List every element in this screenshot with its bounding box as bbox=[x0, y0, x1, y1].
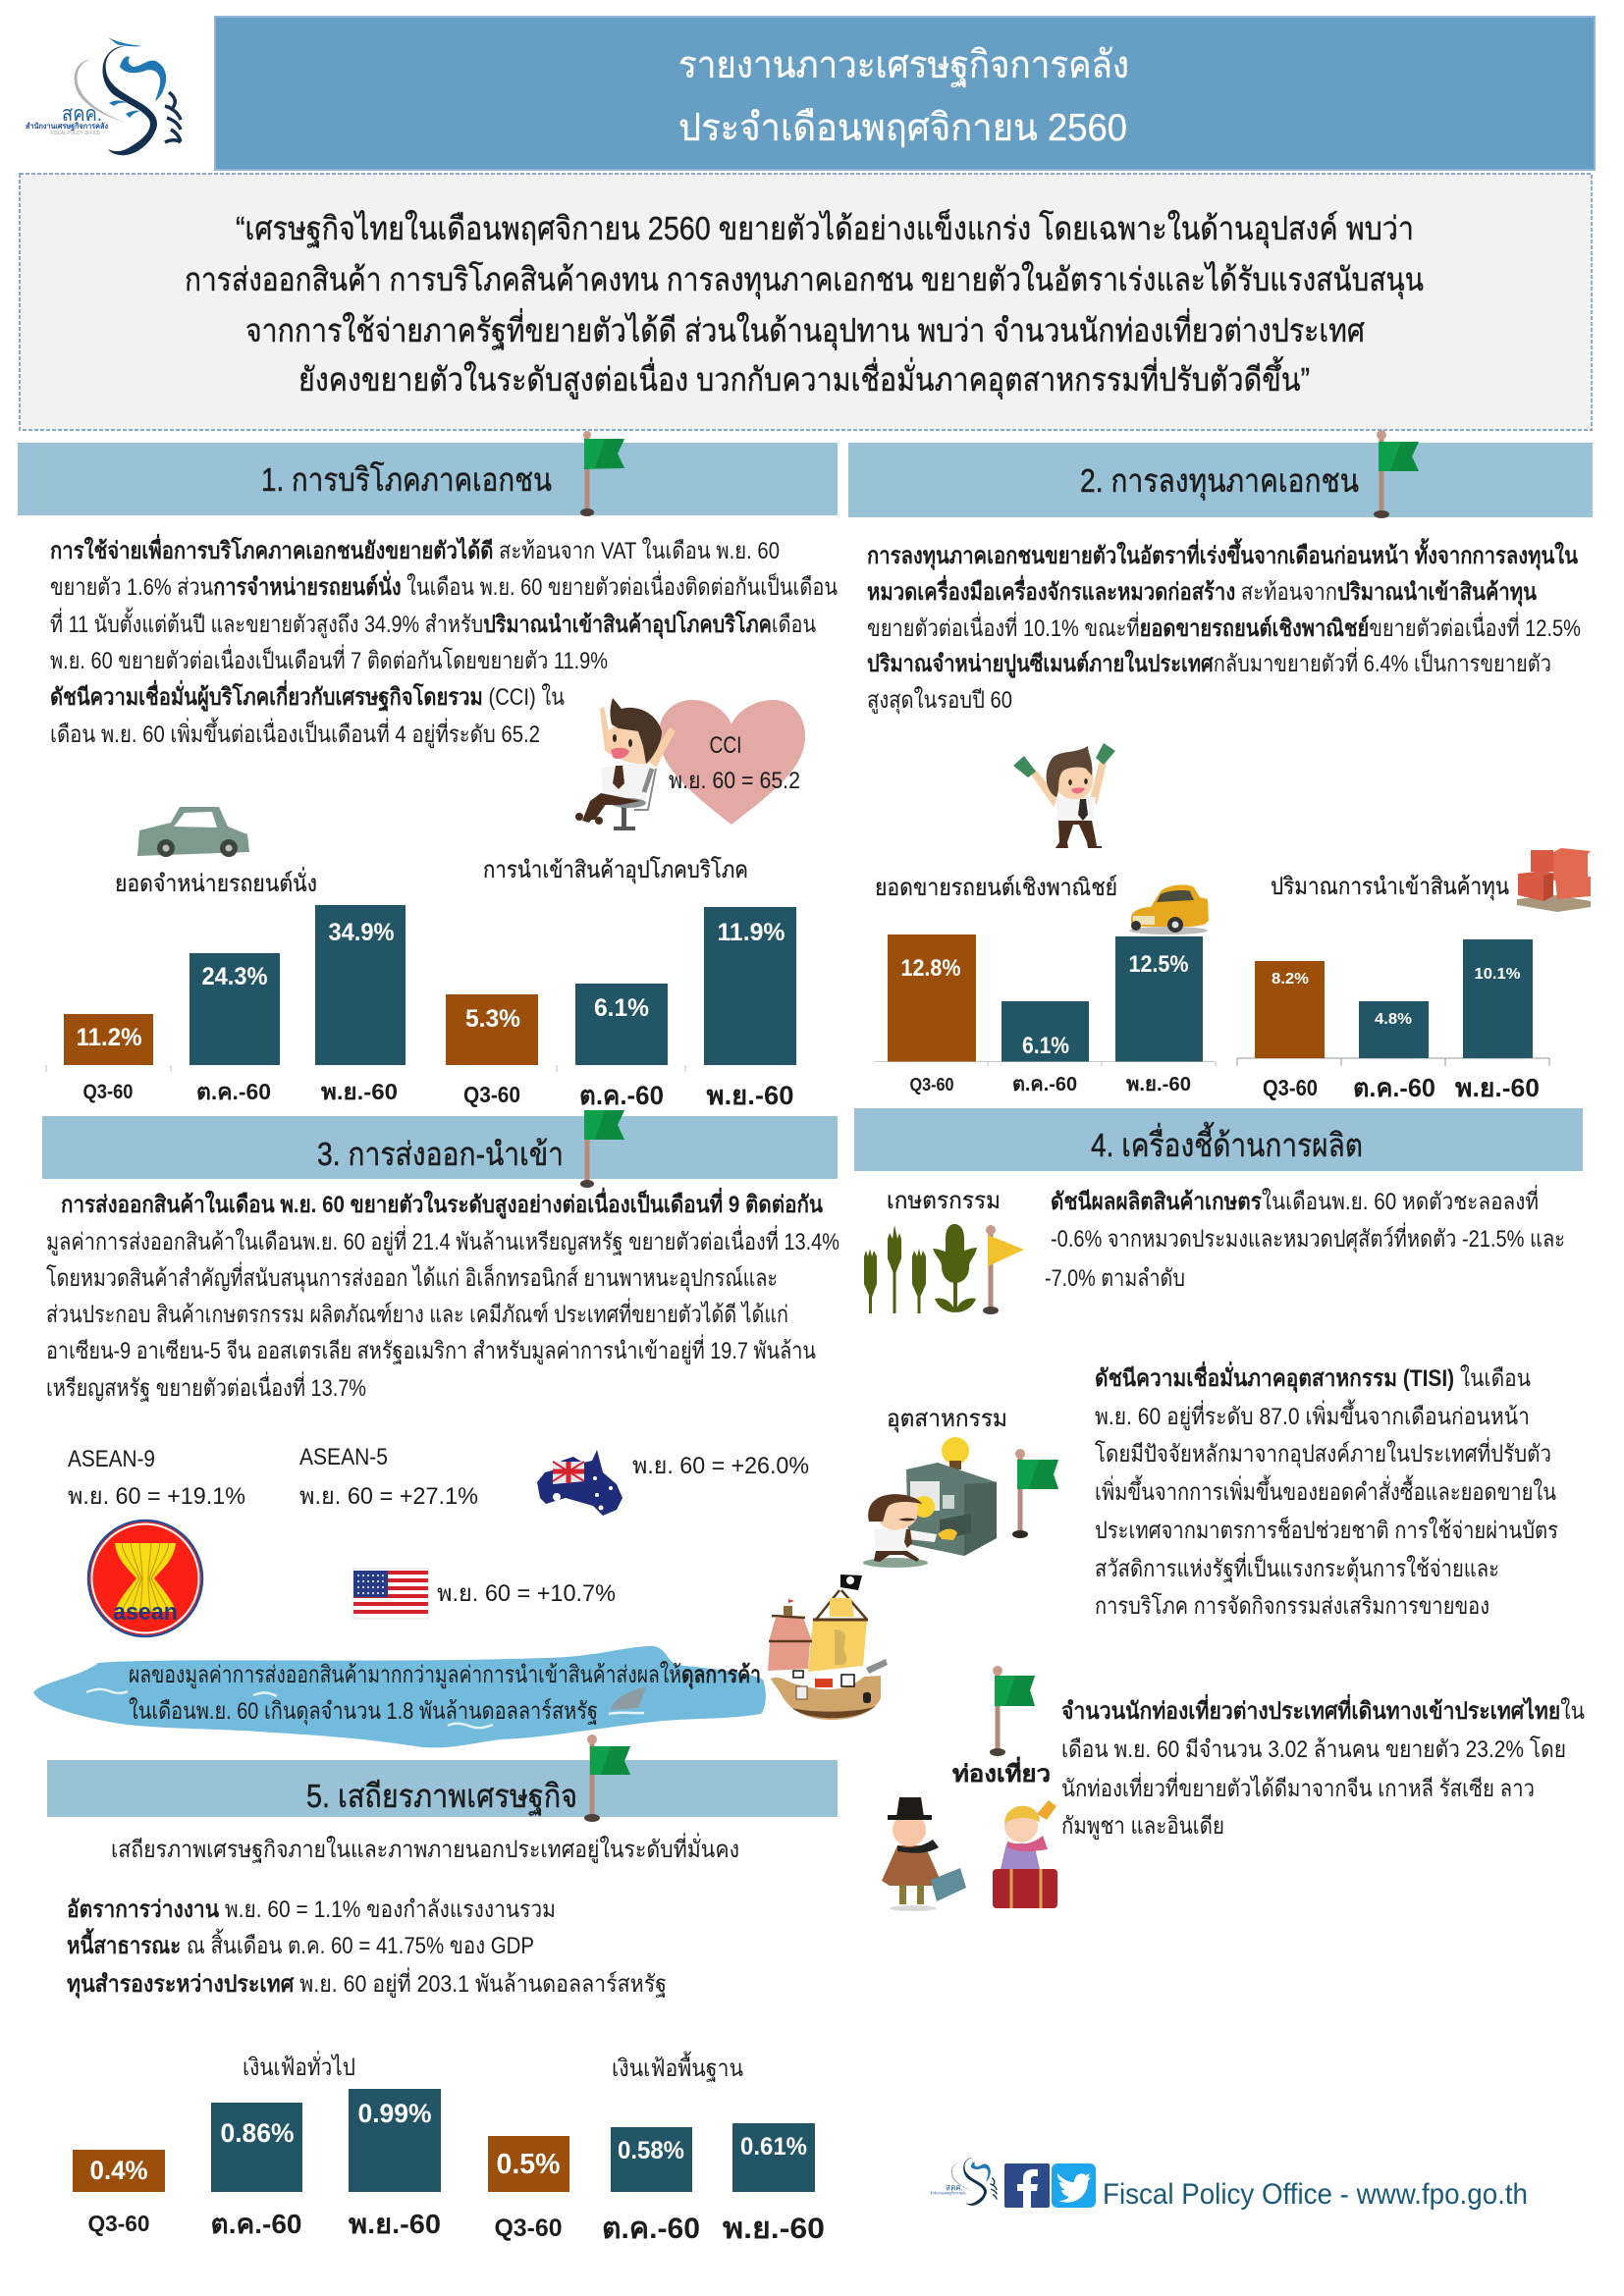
stability indicators bbox=[67, 1896, 667, 2000]
body text: tourism: จำนวนนักท่องเที่ยวต่างประเทศที่เดินทางเข้าประเทศไทยใน bbox=[1061, 1693, 1585, 1725]
heading band 3: 3. การส่งออก-นำเข้า bbox=[317, 1136, 564, 1172]
label: tourism: ท่องเที่ยว bbox=[952, 1756, 1051, 1788]
icon: flag 5 bbox=[584, 1735, 630, 1822]
title line 2: ประจำเดือนพฤศจิกายน 2560 bbox=[678, 107, 1127, 149]
body text: industry: สวัสดิการแห่งรัฐที่เป็นแรงกระตุ้นการใช้จ่ายและ bbox=[1095, 1552, 1499, 1583]
bar chart: commercial car sales: 12.5% bbox=[1129, 951, 1188, 978]
body text 2: สูงสุดในรอบปี 60 bbox=[867, 686, 1012, 715]
body text 1: ขยายตัว 1.6% ส่วนการจำหน่ายรถยนต์นั่ง ในเดือน พ.ย. 60 ขยายตัวต่อเนื่องติดต่อกันเป็นเดือน bbox=[50, 569, 838, 601]
logo: Fiscal Policy Office: FISCAL POLICY OFFICE bbox=[51, 131, 101, 136]
body text: industry: พ.ย. 60 อยู่ที่ระดับ 87.0 เพิ่มขึ้นจากเดือนก่อนหน้า bbox=[1095, 1399, 1530, 1431]
chart label: consumer goods import: การนำเข้าสินค้าอุปโภคบริโภค bbox=[483, 856, 748, 884]
icon: Facebook bbox=[1004, 2163, 1050, 2208]
bar chart: consumer goods import: Q3-60 bbox=[463, 1082, 520, 1107]
CCI heart: พ.ย. 60 = 65.2 bbox=[669, 768, 800, 794]
bar chart: consumer goods import: พ.ย.-60 bbox=[707, 1081, 793, 1110]
subheading: เสถียรภาพเศรษฐกิจภายในและภาพภายนอกประเทศอยู่ในระดับที่มั่นคง bbox=[111, 1833, 739, 1864]
heading band 2 bbox=[848, 443, 1593, 517]
body text 3 bbox=[46, 1187, 839, 1402]
panel: 2. private investment bbox=[848, 430, 1593, 1102]
icon: flag 2 bbox=[1374, 430, 1419, 518]
body text 1 bbox=[50, 533, 838, 749]
bar chart: capital goods import: 4.8% bbox=[1375, 1011, 1412, 1028]
panel: 1. private consumption bbox=[18, 431, 838, 1110]
logo: Fiscal Policy Office: สคค. bbox=[62, 103, 102, 126]
body text: tourism bbox=[1061, 1693, 1585, 1841]
body text: industry: การบริโภค การจัดกิจกรรมส่งเสริมการขายของ bbox=[1095, 1592, 1489, 1620]
body text 3: อาเซียน-9 อาเซียน-5 จีน ออสเตรเลีย สหรัฐอเมริกา สำหรับมูลค่าการนำเข้าอยู่ที่ 19.7 พันล้าน bbox=[46, 1334, 816, 1365]
body text: industry bbox=[1095, 1361, 1558, 1620]
icon: flag tourism bbox=[990, 1666, 1035, 1756]
bar chart: capital goods import: ต.ค.-60 bbox=[1353, 1073, 1435, 1102]
bar chart: capital goods import: Q3-60 bbox=[1263, 1075, 1318, 1100]
heading band 3 bbox=[42, 1116, 838, 1179]
quote box: จากการใช้จ่ายภาครัฐที่ขยายตัวได้ดี ส่วนในด้านอุปทาน พบว่า จำนวนนักท่องเที่ยวต่างประเทศ bbox=[245, 308, 1365, 350]
heading band 2: 2. การลงทุนภาคเอกชน bbox=[1080, 462, 1359, 501]
body text: tourism: กัมพูชา และอินเดีย bbox=[1061, 1813, 1224, 1841]
stat: ASEAN-9: ASEAN-9 bbox=[68, 1446, 155, 1472]
website line: Fiscal Policy Office - www.fpo.go.th bbox=[1103, 2178, 1528, 2211]
bar chart: car sales: Q3-60 bbox=[82, 1081, 134, 1103]
bar chart: commercial car sales: Q3-60 bbox=[909, 1075, 954, 1095]
bar chart: commercial car sales bbox=[874, 934, 1216, 1095]
body text: agriculture bbox=[1045, 1185, 1565, 1292]
bar chart: car sales bbox=[46, 905, 406, 1104]
body text: tourism: เดือน พ.ย. 60 มีจำนวน 3.02 ล้านคน ขยายตัว 23.2% โดย bbox=[1061, 1735, 1566, 1763]
bar chart: car sales: 24.3% bbox=[202, 963, 267, 990]
heading band 1: 1. การบริโภคภาคเอกชน bbox=[261, 461, 552, 498]
stat: USA: พ.ย. 60 = +10.7% bbox=[437, 1580, 616, 1607]
body text: industry: โดยมีปัจจัยหลักมาจากอุปสงค์ภายในประเทศที่ปรับตัว bbox=[1095, 1437, 1551, 1468]
icon: Australia map bbox=[537, 1450, 623, 1516]
icon: Twitter bbox=[1052, 2163, 1096, 2208]
body text 1: พ.ย. 60 ขยายตัวต่อเนื่องเป็นเดือนที่ 7 ติดต่อกันโดยขยายตัว 11.9% bbox=[50, 644, 608, 674]
icon: car bbox=[137, 807, 249, 857]
panel: 3. export-import bbox=[33, 1110, 888, 1747]
stat: Australia: พ.ย. 60 = +26.0% bbox=[632, 1453, 809, 1479]
bar chart: core inflation bbox=[488, 2123, 825, 2245]
stability indicators: หนี้สาธารณะ ณ สิ้นเดือน ต.ค. 60 = 41.75% ของ GDP bbox=[67, 1927, 534, 1959]
bar chart: headline inflation: Q3-60 bbox=[88, 2211, 149, 2236]
body text 1: ดัชนีความเชื่อมั่นผู้บริโภคเกี่ยวกับเศรษฐกิจโดยรวม (CCI) ใน bbox=[50, 679, 565, 713]
quote box: ยังคงขยายตัวในระดับสูงต่อเนื่อง บวกกับความเชื่อมั่นภาคอุตสาหกรรมที่ปรับตัวดีขึ้น” bbox=[298, 356, 1310, 400]
heading band 4: 4. เครื่องชี้ด้านการผลิต bbox=[1091, 1122, 1363, 1163]
logo: Fiscal Policy Office: สำนักงานเศรษฐกิจการคลัง bbox=[26, 122, 108, 132]
body text 1: การใช้จ่ายเพื่อการบริโภคภาคเอกชนยังขยายตัวได้ดี สะท้อนจาก VAT ในเดือน พ.ย. 60 bbox=[50, 533, 780, 564]
heading band 4 bbox=[854, 1108, 1583, 1171]
bar chart: consumer goods import bbox=[446, 907, 796, 1110]
bar chart: headline inflation: 0.4% bbox=[90, 2156, 147, 2185]
bar chart: car sales: ต.ค.-60 bbox=[196, 1079, 271, 1104]
icon: flag 3 bbox=[580, 1110, 624, 1188]
icon: boxes on pallet bbox=[1517, 848, 1591, 912]
label: agriculture: เกษตรกรรม bbox=[887, 1188, 1001, 1214]
stat: ASEAN-9: พ.ย. 60 = +19.1% bbox=[68, 1483, 245, 1510]
bar chart: commercial car sales: พ.ย.-60 bbox=[1126, 1074, 1191, 1095]
bar chart: core inflation: 0.58% bbox=[618, 2137, 684, 2164]
stat: ASEAN-9 bbox=[68, 1446, 245, 1510]
bar chart: headline inflation: ต.ค.-60 bbox=[210, 2209, 302, 2239]
icon: small logo: สคค. bbox=[946, 2182, 963, 2192]
bar chart: headline inflation bbox=[73, 2089, 441, 2239]
bar chart: capital goods import bbox=[1237, 939, 1549, 1102]
bar chart: headline inflation: 0.86% bbox=[220, 2118, 295, 2148]
bar chart: headline inflation: 0.99% bbox=[357, 2099, 432, 2128]
bar chart: core inflation: 0.61% bbox=[740, 2133, 807, 2161]
body text 2: หมวดเครื่องมือเครื่องจักรและหมวดก่อสร้าง สะท้อนจากปริมาณนำเข้าสินค้าทุน bbox=[867, 574, 1538, 608]
stability indicators: ทุนสำรองระหว่างประเทศ พ.ย. 60 อยู่ที่ 203.1 พันล้านดอลลาร์สหรัฐ bbox=[67, 1967, 667, 2000]
bar chart: core inflation: พ.ย.-60 bbox=[723, 2213, 825, 2245]
chart label: headline inflation: เงินเฟ้อทั่วไป bbox=[243, 2051, 355, 2081]
chart label: capital goods import: ปริมาณการนำเข้าสินค้าทุน bbox=[1271, 874, 1509, 901]
body text 1: ที่ 11 นับตั้งแต่ต้นปี และขยายตัวสูงถึง 34.9% สำหรับปริมาณนำเข้าสินค้าอุปโภคบริโภคเดือน bbox=[50, 607, 816, 640]
body text 3: การส่งออกสินค้าในเดือน พ.ย. 60 ขยายตัวในระดับสูงอย่างต่อเนื่องเป็นเดือนที่ 9 ติดต่อกัน bbox=[61, 1187, 824, 1219]
bar chart: commercial car sales: ต.ค.-60 bbox=[1012, 1074, 1077, 1095]
panel: 5. economic stability bbox=[47, 1735, 838, 2245]
quote box bbox=[20, 174, 1592, 430]
CCI heart bbox=[659, 700, 805, 825]
icon: small logo: สำนักงานเศรษฐกิจการคลัง bbox=[930, 2190, 966, 2195]
bar chart: commercial car sales: 6.1% bbox=[1022, 1033, 1069, 1059]
bar chart: consumer goods import: 11.9% bbox=[717, 919, 785, 946]
icon: ASEAN logo bbox=[88, 1521, 202, 1636]
bar chart: consumer goods import: 6.1% bbox=[594, 994, 649, 1022]
bar chart: car sales: พ.ย.-60 bbox=[321, 1079, 398, 1104]
title line 1: รายงานภาวะเศรษฐกิจการคลัง bbox=[678, 44, 1129, 87]
heading band 5: 5. เสถียรภาพเศรษฐกิจ bbox=[306, 1778, 577, 1816]
label: industry: อุตสาหกรรม bbox=[887, 1406, 1007, 1433]
icon: man holding money bbox=[1013, 743, 1115, 848]
bar chart: core inflation: Q3-60 bbox=[495, 2215, 562, 2242]
CCI heart: CCI bbox=[709, 732, 742, 759]
panel: 4. production indicators bbox=[854, 1108, 1585, 1911]
chart label: core inflation: เงินเฟ้อพื้นฐาน bbox=[612, 2051, 743, 2082]
bar chart: capital goods import: พ.ย.-60 bbox=[1455, 1073, 1540, 1102]
title banner bbox=[215, 17, 1595, 170]
bar chart: headline inflation: พ.ย.-60 bbox=[349, 2209, 441, 2239]
chart label: car sales: ยอดจำหน่ายรถยนต์นั่ง bbox=[115, 867, 317, 897]
bar chart: consumer goods import: 5.3% bbox=[465, 1005, 520, 1033]
bar chart: car sales: 11.2% bbox=[77, 1024, 141, 1051]
heading band 5 bbox=[47, 1760, 838, 1817]
icon: yellow flag bbox=[983, 1225, 1024, 1314]
bar chart: commercial car sales: 12.8% bbox=[901, 955, 960, 982]
logo: Fiscal Policy Office bbox=[26, 37, 181, 155]
icon: US flag bbox=[353, 1569, 428, 1619]
stability indicators: อัตราการว่างงาน พ.ย. 60 = 1.1% ของกำลังแรงงานรวม bbox=[67, 1896, 556, 1923]
icon: small logo bbox=[930, 2158, 997, 2206]
bar chart: consumer goods import: ต.ค.-60 bbox=[579, 1081, 664, 1110]
icon: yellow truck bbox=[1129, 884, 1209, 934]
bar chart: car sales: 34.9% bbox=[328, 919, 395, 946]
bar chart: core inflation: 0.5% bbox=[497, 2149, 561, 2180]
body text: tourism: นักท่องเที่ยวที่ขยายตัวได้ดีมาจากจีน เกาหลี รัสเซีย ลาว bbox=[1061, 1772, 1535, 1802]
quote box: “เศรษฐกิจไทยในเดือนพฤศจิกายน 2560 ขยายตัวได้อย่างแข็งแกร่ง โดยเฉพาะในด้านอุปสงค์ พบว่า bbox=[236, 209, 1414, 248]
icon: flag industry bbox=[1012, 1449, 1058, 1538]
bar chart: capital goods import: 8.2% bbox=[1272, 971, 1309, 988]
icon: male tourist bbox=[882, 1797, 966, 1911]
body text 2 bbox=[867, 537, 1581, 715]
body text 3: เหรียญสหรัฐ ขยายตัวต่อเนื่องที่ 13.7% bbox=[46, 1371, 366, 1402]
body text: agriculture: ดัชนีผลผลิตสินค้าเกษตรในเดือนพ.ย. 60 หดตัวชะลอลงที่ bbox=[1051, 1185, 1539, 1215]
body text 1: เดือน พ.ย. 60 เพิ่มขึ้นต่อเนื่องเป็นเดือนที่ 4 อยู่ที่ระดับ 65.2 bbox=[50, 717, 540, 749]
icon: pirate ship bbox=[768, 1575, 888, 1720]
stat: ASEAN-5: ASEAN-5 bbox=[299, 1444, 388, 1470]
stat: ASEAN-5 bbox=[299, 1444, 478, 1510]
body text 3: โดยหมวดสินค้าสำคัญที่สนับสนุนการส่งออก ได้แก่ อิเล็กทรอนิกส์ ยานพาหนะอุปกรณ์และ bbox=[46, 1261, 778, 1293]
trade balance water callout bbox=[33, 1646, 766, 1747]
icon: flag 1 bbox=[580, 431, 624, 516]
heading band 1 bbox=[18, 443, 838, 515]
body text 3: ส่วนประกอบ สินค้าเกษตรกรรม ผลิตภัณฑ์ยาง และ เคมีภัณฑ์ ประเทศที่ขยายตัวได้ดี ได้แก่ bbox=[46, 1298, 788, 1328]
icon: man at machine bbox=[863, 1437, 997, 1568]
body text 2: ปริมาณจำหน่ายปูนซีเมนต์ภายในประเทศกลับมาขยายตัวที่ 6.4% เป็นการขยายตัว bbox=[867, 647, 1551, 678]
trade balance water callout: ผลของมูลค่าการส่งออกสินค้ามากกว่ามูลค่าการนำเข้าสินค้าส่งผลให้ดุลการค้า bbox=[129, 1661, 761, 1690]
stat: ASEAN-5: พ.ย. 60 = +27.1% bbox=[299, 1483, 478, 1510]
icon: female tourist bbox=[993, 1800, 1057, 1908]
body text: agriculture: -7.0% ตามลำดับ bbox=[1045, 1265, 1185, 1292]
trade balance water callout: ในเดือนพ.ย. 60 เกินดุลจำนวน 1.8 พันล้านดอลลาร์สหรัฐ bbox=[129, 1697, 598, 1726]
bar chart: core inflation: ต.ค.-60 bbox=[602, 2213, 700, 2245]
icon: wheat and corn bbox=[864, 1224, 977, 1313]
bar chart: capital goods import: 10.1% bbox=[1475, 966, 1520, 983]
body text 3: มูลค่าการส่งออกสินค้าในเดือนพ.ย. 60 อยู่ที่ 21.4 พันล้านเหรียญสหรัฐ ขยายตัวต่อเนื่องที่ 13.4% bbox=[46, 1225, 839, 1256]
icon: man on chair bbox=[575, 698, 676, 830]
icon: ASEAN logo: asean bbox=[113, 1599, 178, 1626]
body text 2: ขยายตัวต่อเนื่องที่ 10.1% ขณะที่ยอดขายรถยนต์เชิงพาณิชย์ขยายตัวต่อเนื่องที่ 12.5% bbox=[867, 612, 1581, 642]
quote box: การส่งออกสินค้า การบริโภคสินค้าคงทน การลงทุนภาคเอกชน ขยายตัวในอัตราเร่งและได้รับแรงสนับสนุน bbox=[185, 261, 1424, 299]
body text: industry: ดัชนีความเชื่อมั่นภาคอุตสาหกรรม (TISI) ในเดือน bbox=[1095, 1361, 1531, 1394]
footer bbox=[930, 2158, 1528, 2211]
chart label: commercial car sales: ยอดขายรถยนต์เชิงพาณิชย์ bbox=[875, 874, 1117, 901]
